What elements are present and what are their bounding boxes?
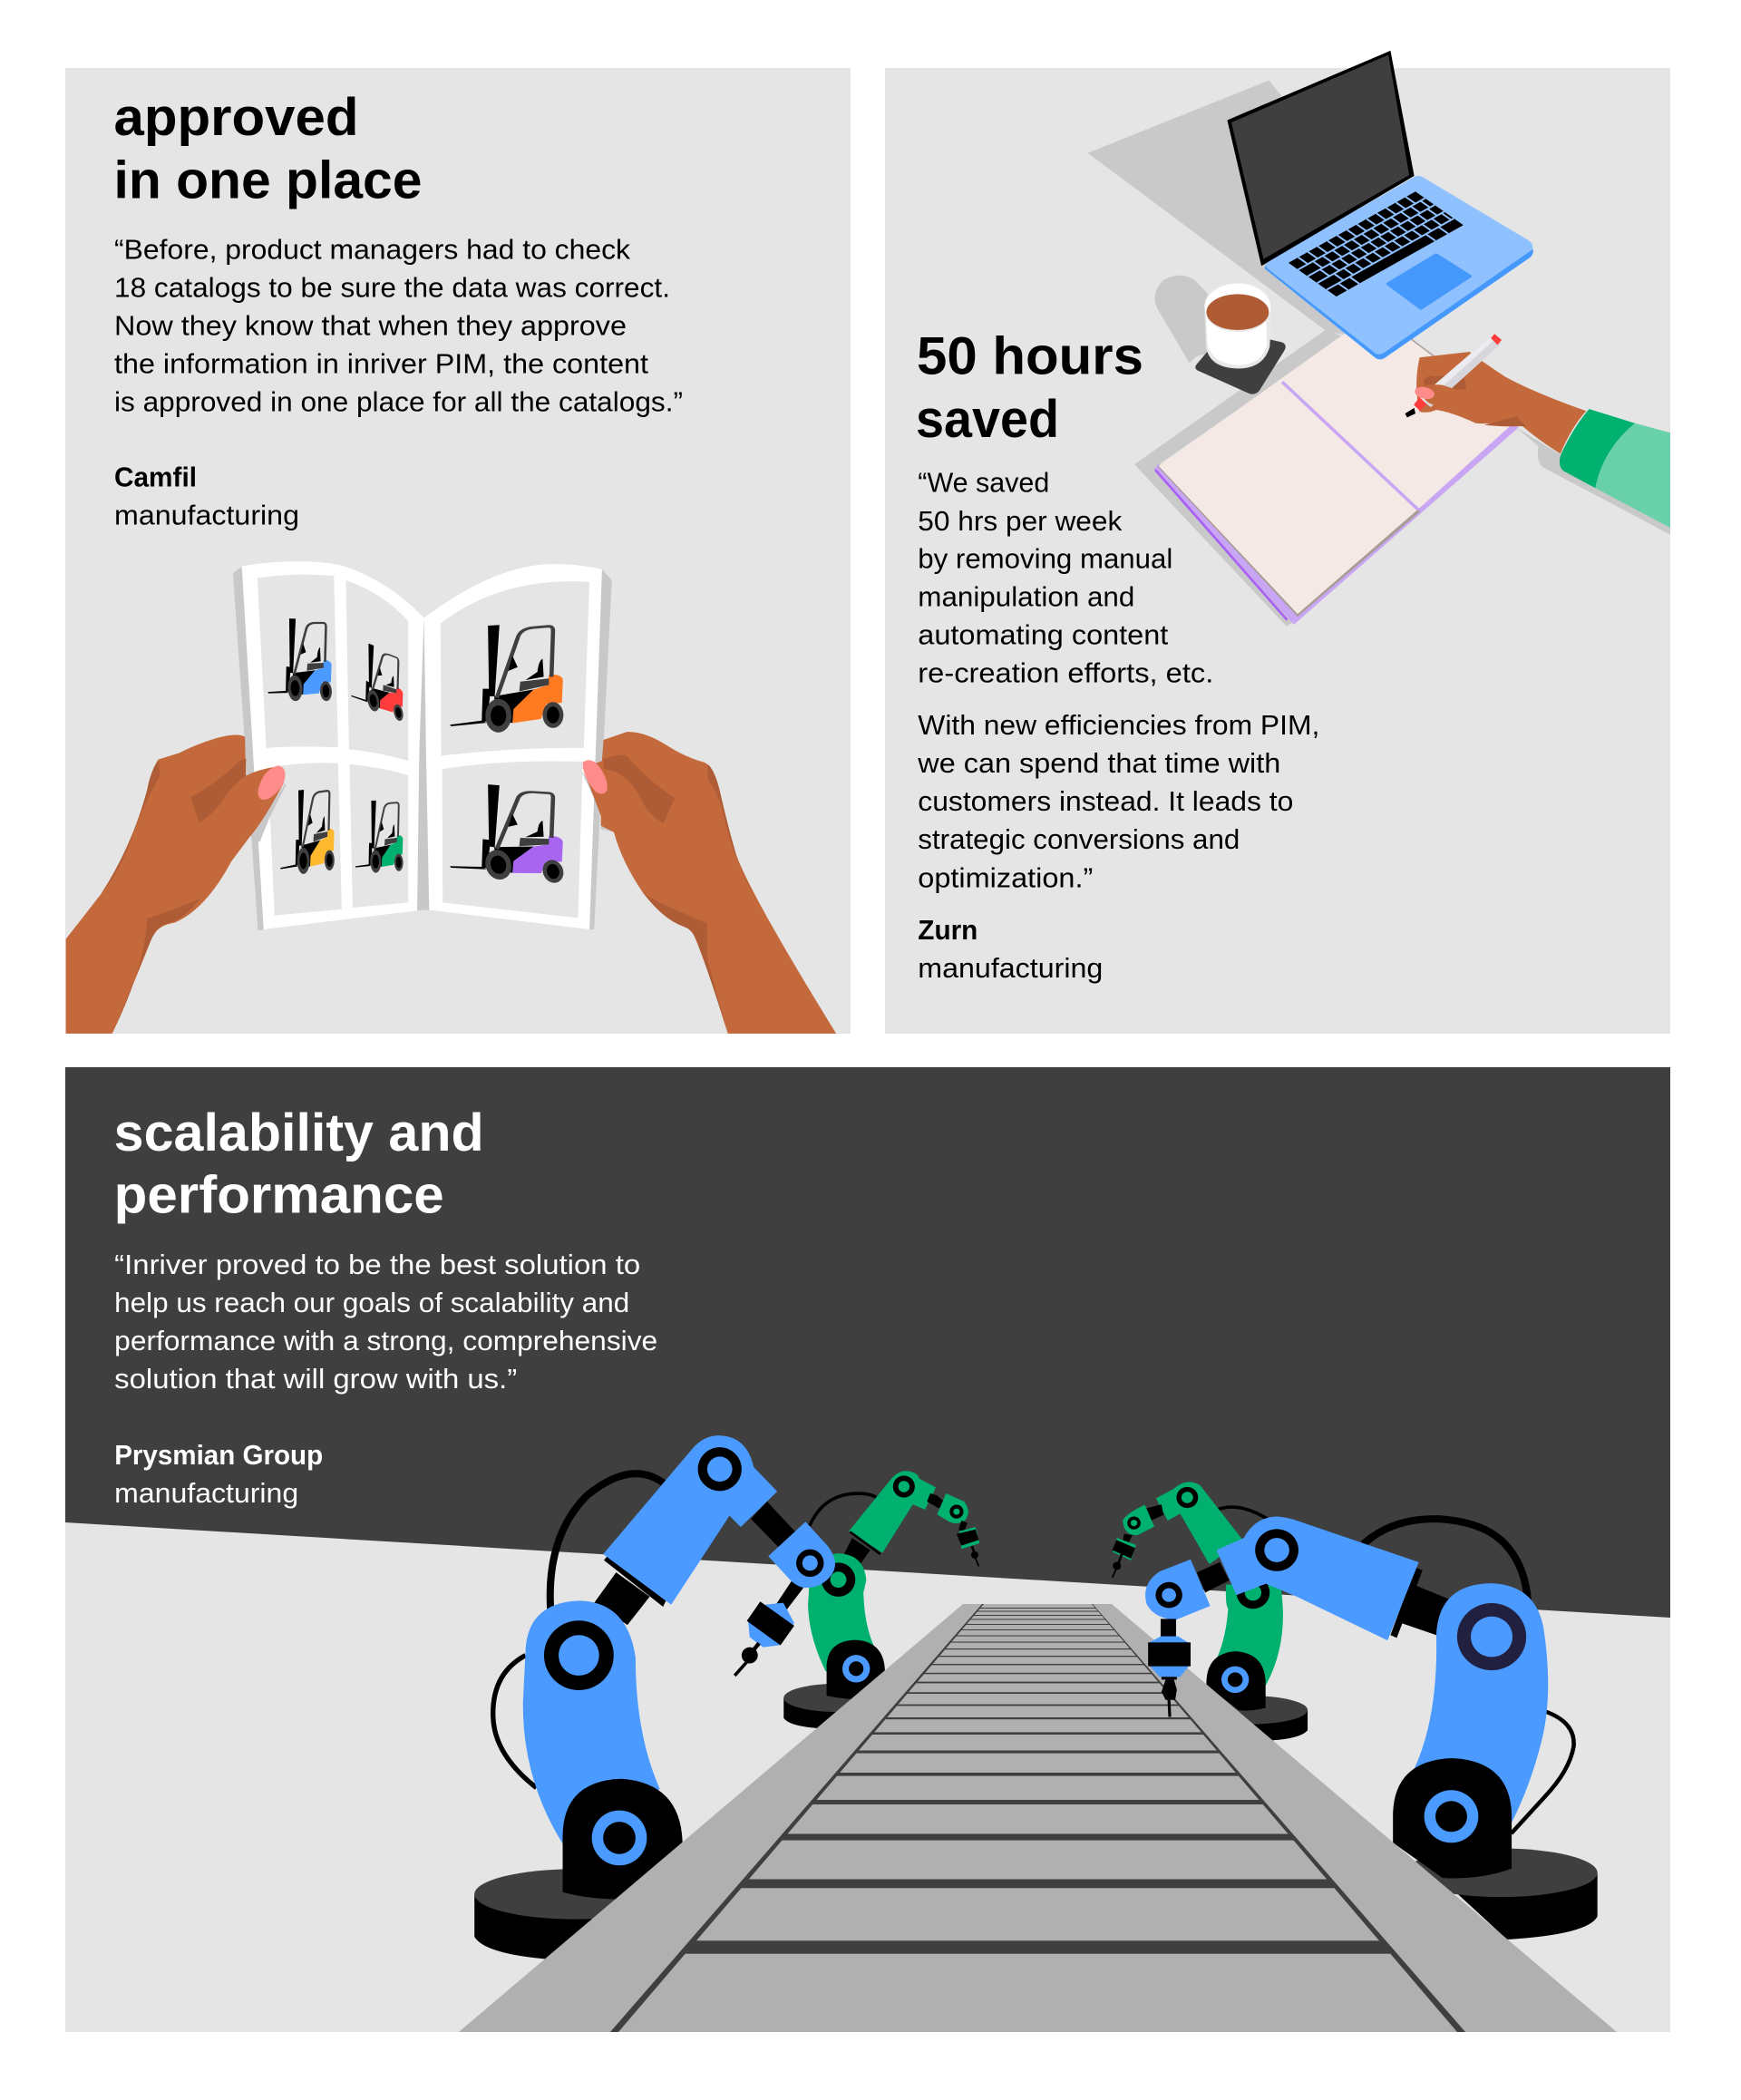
forklift: red [351, 635, 404, 725]
arm shadow [1515, 427, 1670, 535]
attribution: Zurn manufacturing: manufacturing [918, 952, 1103, 984]
keyboard [1289, 191, 1464, 297]
text block: Prysmian quote: help us reach our goals of scalability and [114, 1287, 629, 1318]
text block: Zurn quote part 1: 50 hrs per week [918, 505, 1123, 537]
heading: approved in one place: in one place [114, 151, 423, 210]
text block: Zurn quote part 1: manipulation and [918, 580, 1134, 613]
heading: approved in one place [114, 88, 423, 210]
forklift: purple [450, 779, 563, 888]
text block: Zurn quote part 2: strategic conversions and [918, 823, 1240, 855]
text block: Prysmian quote: performance with a strong, comprehensive [114, 1325, 657, 1356]
illustration: left robots [474, 1435, 979, 1961]
robot: green rear left [783, 1471, 979, 1728]
text block: Zurn quote part 2: optimization.” [918, 861, 1093, 894]
heading: 50 hours saved: 50 hours [917, 326, 1143, 386]
panel: approved in one place [65, 68, 851, 1034]
robot: blue front right [1145, 1516, 1598, 1940]
heading: 50 hours saved [916, 326, 1143, 449]
text block: Zurn quote part 2: With new efficiencies from PIM, [918, 709, 1319, 741]
illustration: desk with laptop, coffee, notebook and writing hand [1088, 51, 1670, 627]
panel: 50 hours saved [885, 51, 1670, 1034]
attribution: Camfil manufacturing: Camfil [114, 461, 197, 493]
coffee cup on coaster [1155, 276, 1286, 394]
robot tool: blue drill over conveyor [1148, 1619, 1191, 1716]
panel: scalability and performance [65, 1067, 1670, 2032]
text block: Zurn quote part 2 [917, 709, 1319, 894]
text block: Prysmian quote [114, 1249, 657, 1395]
robot: green rear right [1113, 1482, 1308, 1740]
text block: Prysmian quote: “Inriver proved to be the best solution to [114, 1249, 640, 1280]
forklift: green [355, 799, 404, 874]
attribution: Camfil manufacturing [114, 461, 299, 531]
catalog pages [233, 561, 612, 930]
illustration: right robots [1113, 1482, 1598, 1940]
text block: Zurn quote part 1: by removing manual [918, 542, 1172, 575]
heading: scalability and performance: performance [114, 1166, 444, 1224]
text block: Camfil quote [114, 234, 683, 417]
text block: Camfil quote: Now they know that when they approve [114, 310, 627, 341]
trackpad [1388, 255, 1470, 308]
heading: approved in one place: approved [114, 88, 359, 147]
attribution: Prysmian Group manufacturing: manufacturing [114, 1477, 298, 1509]
laptop shadow [1088, 81, 1347, 335]
text block: Zurn quote part 1: automating content [918, 618, 1169, 651]
text block: Camfil quote: 18 catalogs to be sure the data was correct. [114, 272, 670, 303]
text block: Zurn quote part 2: customers instead. It leads to [918, 785, 1293, 817]
attribution: Camfil manufacturing: manufacturing [114, 499, 299, 531]
text block: Zurn quote part 1: “We saved [918, 466, 1049, 499]
right hand [581, 732, 836, 1034]
attribution: Zurn manufacturing: Zurn [918, 914, 977, 946]
attribution: Prysmian Group manufacturing: Prysmian Group [114, 1439, 323, 1471]
forklift: yellow [280, 790, 335, 874]
heading: 50 hours saved: saved [916, 390, 1059, 449]
forklift: blue [267, 616, 332, 705]
illustration: hands holding catalog [66, 561, 836, 1034]
text block: Camfil quote: the information in inriver PIM, the content [114, 348, 648, 379]
text block: Zurn quote part 1 [918, 466, 1213, 689]
writing hand with pen and sleeve [1405, 334, 1670, 528]
heading: scalability and performance: scalability and [114, 1103, 484, 1162]
text block: Zurn quote part 2: we can spend that time with [917, 747, 1280, 779]
notebook [1134, 330, 1518, 627]
text block: Camfil quote: “Before, product managers had to check [114, 234, 630, 265]
conveyor belt [459, 1604, 1617, 2032]
attribution: Prysmian Group manufacturing [114, 1439, 323, 1509]
attribution: Zurn manufacturing [918, 914, 1103, 984]
text block: Zurn quote part 1: re-creation efforts, etc. [918, 656, 1213, 689]
left hand [66, 735, 286, 1034]
robot: blue front left [474, 1435, 835, 1961]
laptop [1227, 51, 1533, 359]
text block: Prysmian quote: solution that will grow with us.” [114, 1363, 517, 1395]
forklift: orange [450, 625, 563, 733]
heading: scalability and performance [114, 1103, 484, 1224]
text block: Camfil quote: is approved in one place for all the catalogs.” [114, 386, 683, 417]
